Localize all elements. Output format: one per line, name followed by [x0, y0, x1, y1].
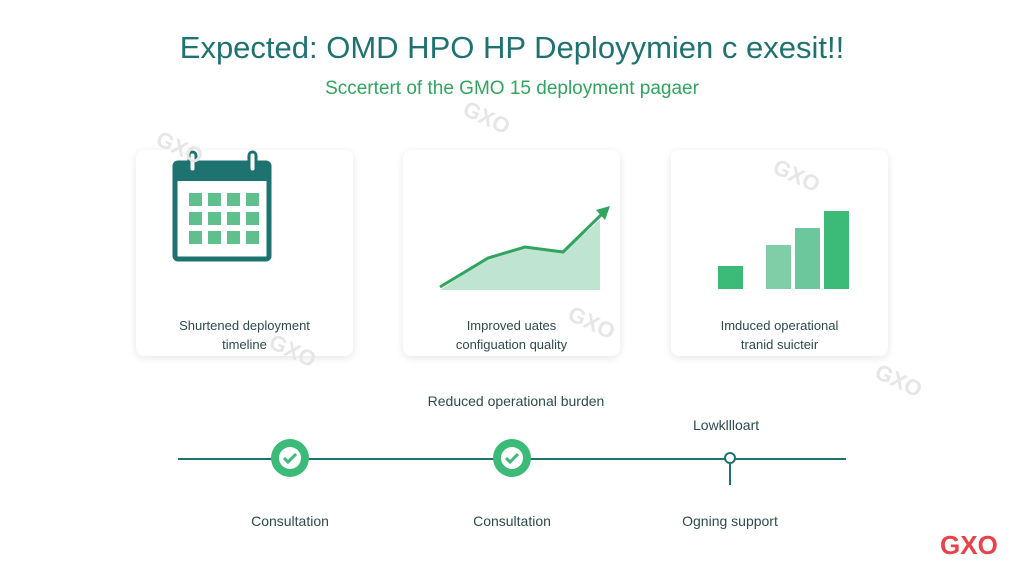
watermarks: GXO [152, 126, 207, 169]
milestone 2 [493, 439, 531, 477]
watermarks: GXO [265, 329, 320, 372]
watermarks: GXO [459, 96, 514, 139]
text: Consultation [473, 513, 551, 529]
panel: quality card [403, 150, 620, 356]
panel: operational card [671, 150, 888, 356]
text: quality label: Improved uates [467, 318, 556, 333]
timeline [178, 439, 846, 485]
text: quality label [456, 318, 568, 352]
milestone 1 [271, 439, 309, 477]
text: timeline label: Shurtened deployment [179, 318, 310, 333]
text: quality label: configuation quality [456, 337, 567, 352]
text: step labels: Consultation [251, 513, 329, 529]
text: timeline label: timeline [222, 337, 267, 352]
text: timeline label [179, 318, 310, 352]
watermarks: GXO [871, 359, 926, 402]
icon: calendar [172, 150, 272, 262]
text: Ogning support [682, 513, 778, 529]
text: operational label [721, 318, 838, 352]
title: Expected: OMD HPO HP Deployymien c exesit!! [180, 30, 844, 65]
chart: area line [439, 206, 610, 290]
watermarks: GXO [769, 154, 824, 197]
text: reduced burden: Reduced operational burden [428, 393, 604, 409]
milestone 3 [725, 453, 735, 485]
text: lowkilloart: Lowkllloart [693, 417, 759, 433]
text: operational label: tranid suicteir [741, 337, 818, 352]
logo: GXO [940, 530, 998, 560]
panel: timeline card [136, 150, 353, 356]
watermarks: GXO [564, 301, 619, 344]
chart: bars [718, 211, 849, 289]
text: operational label: Imduced operational [721, 318, 838, 333]
subtitle: Sccertert of the GMO 15 deployment pagaer [325, 78, 699, 99]
